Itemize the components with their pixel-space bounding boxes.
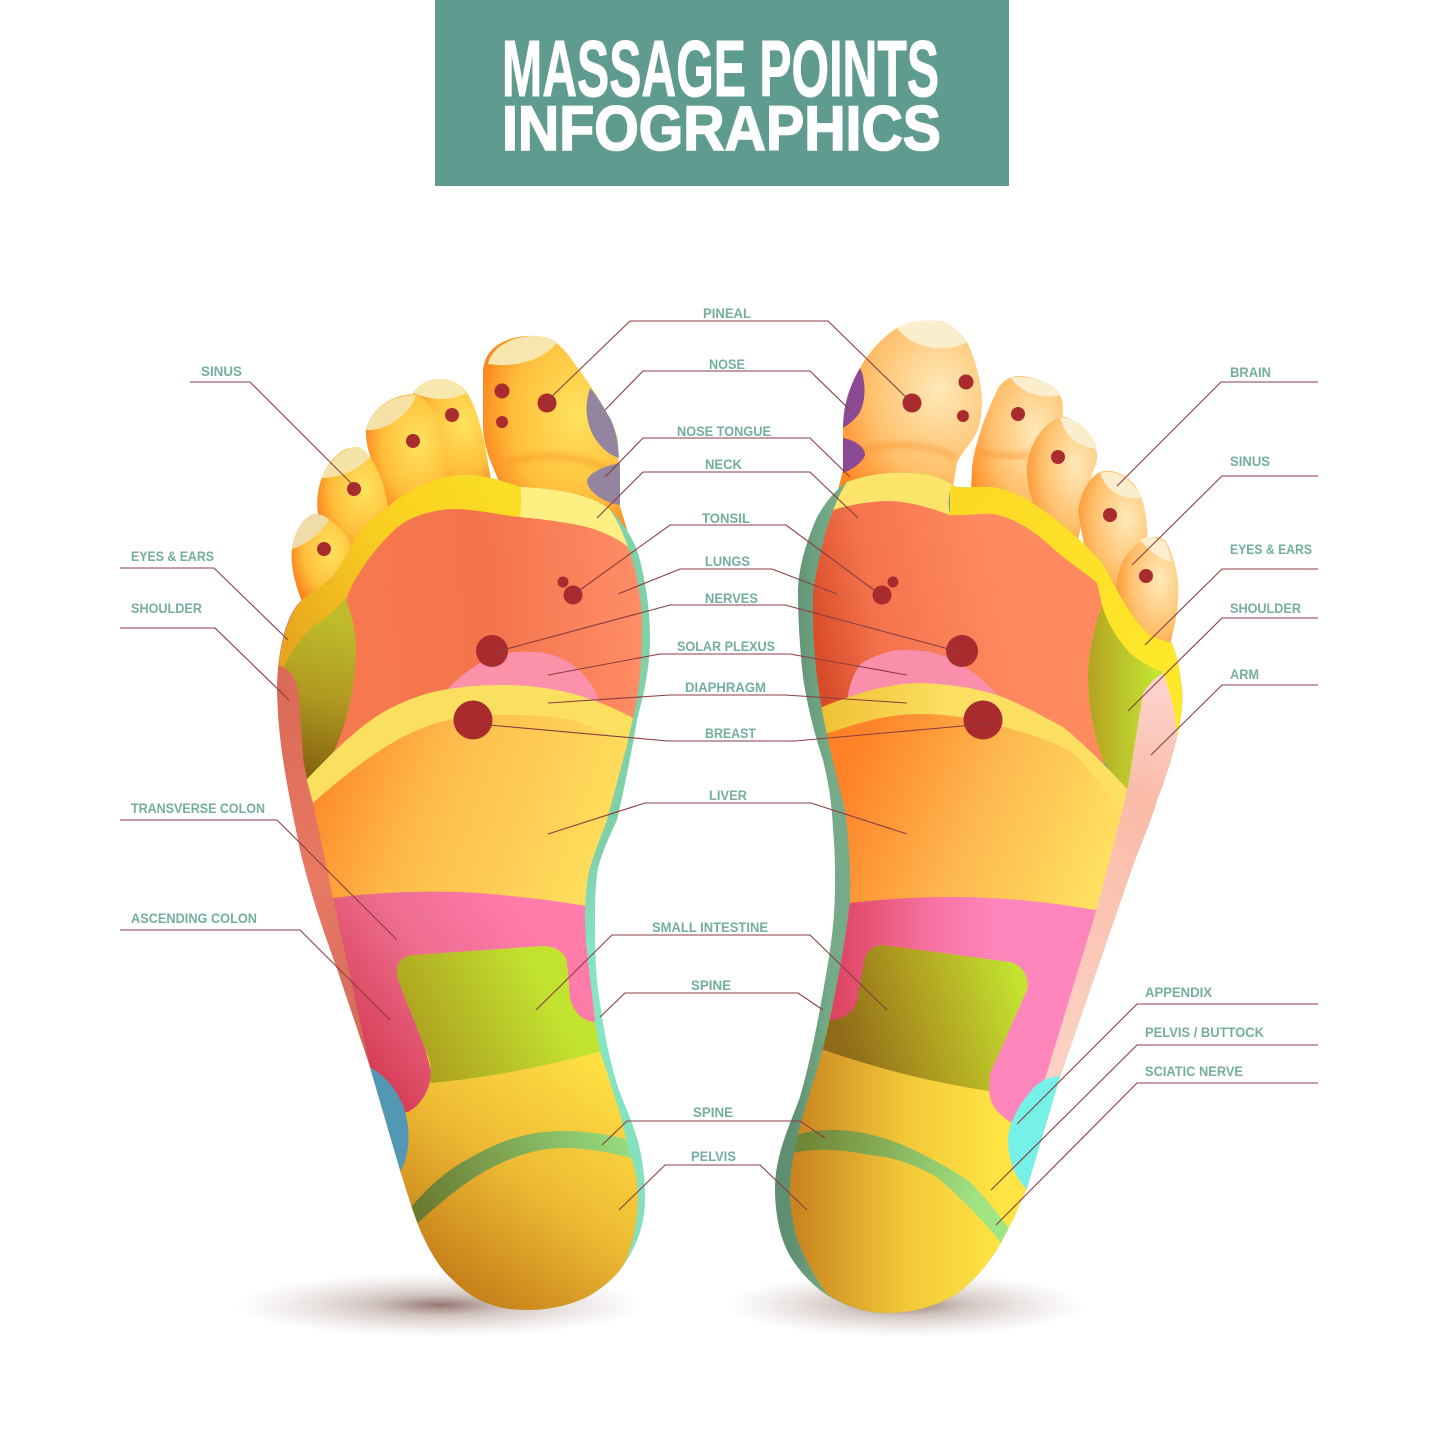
title: massage points: MASSAGE POINTS (502, 24, 939, 113)
labels: ASCENDING COLON (131, 911, 257, 926)
labels: SCIATIC NERVE (1145, 1064, 1243, 1079)
left foot outer strips (270, 470, 660, 1320)
labels: NOSE TONGUE (677, 424, 771, 439)
left fourth toe (317, 447, 389, 552)
labels: TONSIL (702, 511, 750, 526)
small intestine green zone (815, 945, 1028, 1091)
solar plexus (448, 652, 598, 702)
left foot massage dots (454, 576, 582, 740)
heel (380, 1000, 638, 1310)
spine strip (460, 470, 660, 1320)
labels: LUNGS (705, 554, 750, 569)
ground shadows (235, 1273, 1085, 1337)
lungs zone (800, 501, 1110, 800)
left foot sole zones (279, 474, 642, 1310)
arm zone (1045, 673, 1190, 1085)
labels: LIVER (709, 788, 747, 803)
left second toe (413, 379, 491, 490)
labels: SOLAR PLEXUS (677, 639, 775, 654)
left fifth toe (292, 514, 351, 604)
leader lines (120, 321, 1318, 1225)
right fifth toe (1117, 537, 1178, 645)
diaphragm band (810, 683, 1128, 812)
left third toe (366, 394, 446, 515)
title banner: INFOGRAPHICS (502, 94, 941, 164)
left foot (270, 336, 660, 1330)
small intestine pink zone (333, 892, 596, 1114)
labels: SHOULDER (1230, 601, 1301, 616)
neck band (520, 487, 632, 557)
liver zone (313, 715, 627, 925)
pelvis band (412, 1131, 631, 1224)
right foot spine strip (770, 470, 1200, 1320)
right second toe (971, 376, 1063, 515)
labels: SMALL INTESTINE (652, 920, 768, 935)
right foot massage dots (872, 576, 1002, 740)
labels: DIAPHRAGM (685, 680, 766, 695)
shoulder and arm strip (270, 470, 460, 1320)
shoulder green (284, 598, 356, 785)
labels: PELVIS (691, 1149, 736, 1164)
labels: PINEAL (703, 306, 751, 321)
labels: SINUS (201, 364, 242, 379)
small intestine pink zone (828, 897, 1096, 1122)
labels: NOSE (709, 357, 745, 372)
right third toe (1027, 416, 1097, 540)
lungs zone (320, 509, 660, 780)
labels (131, 306, 1312, 1164)
heel (780, 1000, 1060, 1330)
right foot sole zones (780, 460, 1200, 1330)
neck band (826, 472, 952, 530)
labels: EYES & EARS (1230, 542, 1312, 557)
brain and eyes band (950, 484, 1182, 760)
labels: SINUS (1230, 454, 1270, 469)
right foot (770, 320, 1200, 1330)
small intestine green zone (397, 946, 603, 1083)
labels: APPENDIX (1145, 985, 1212, 1000)
liver zone (810, 714, 1130, 925)
left foot toes (292, 336, 628, 604)
solar plexus (848, 650, 997, 698)
right fourth toe (1078, 471, 1147, 590)
labels: SHOULDER (131, 601, 202, 616)
labels: TRANSVERSE COLON (131, 801, 265, 816)
left big toe (483, 336, 628, 533)
pelvis band (794, 1130, 1008, 1242)
labels: NERVES (705, 591, 758, 606)
labels: EYES & EARS (131, 549, 214, 564)
labels: BRAIN (1230, 365, 1271, 380)
labels: SPINE (693, 1105, 733, 1120)
title banner (435, 0, 1009, 186)
labels: SPINE (691, 978, 731, 993)
labels: BREAST (705, 726, 757, 741)
appendix teal (1008, 1076, 1060, 1189)
right big toe (838, 320, 982, 495)
eyes and ears band (279, 474, 522, 680)
right foot toes (838, 320, 1178, 645)
shoulder green (1088, 605, 1163, 800)
diaphragm band (306, 685, 633, 803)
labels: ARM (1230, 667, 1259, 682)
blue zone (370, 1068, 408, 1172)
labels: PELVIS / BUTTOCK (1145, 1025, 1264, 1040)
labels: NECK (705, 457, 742, 472)
